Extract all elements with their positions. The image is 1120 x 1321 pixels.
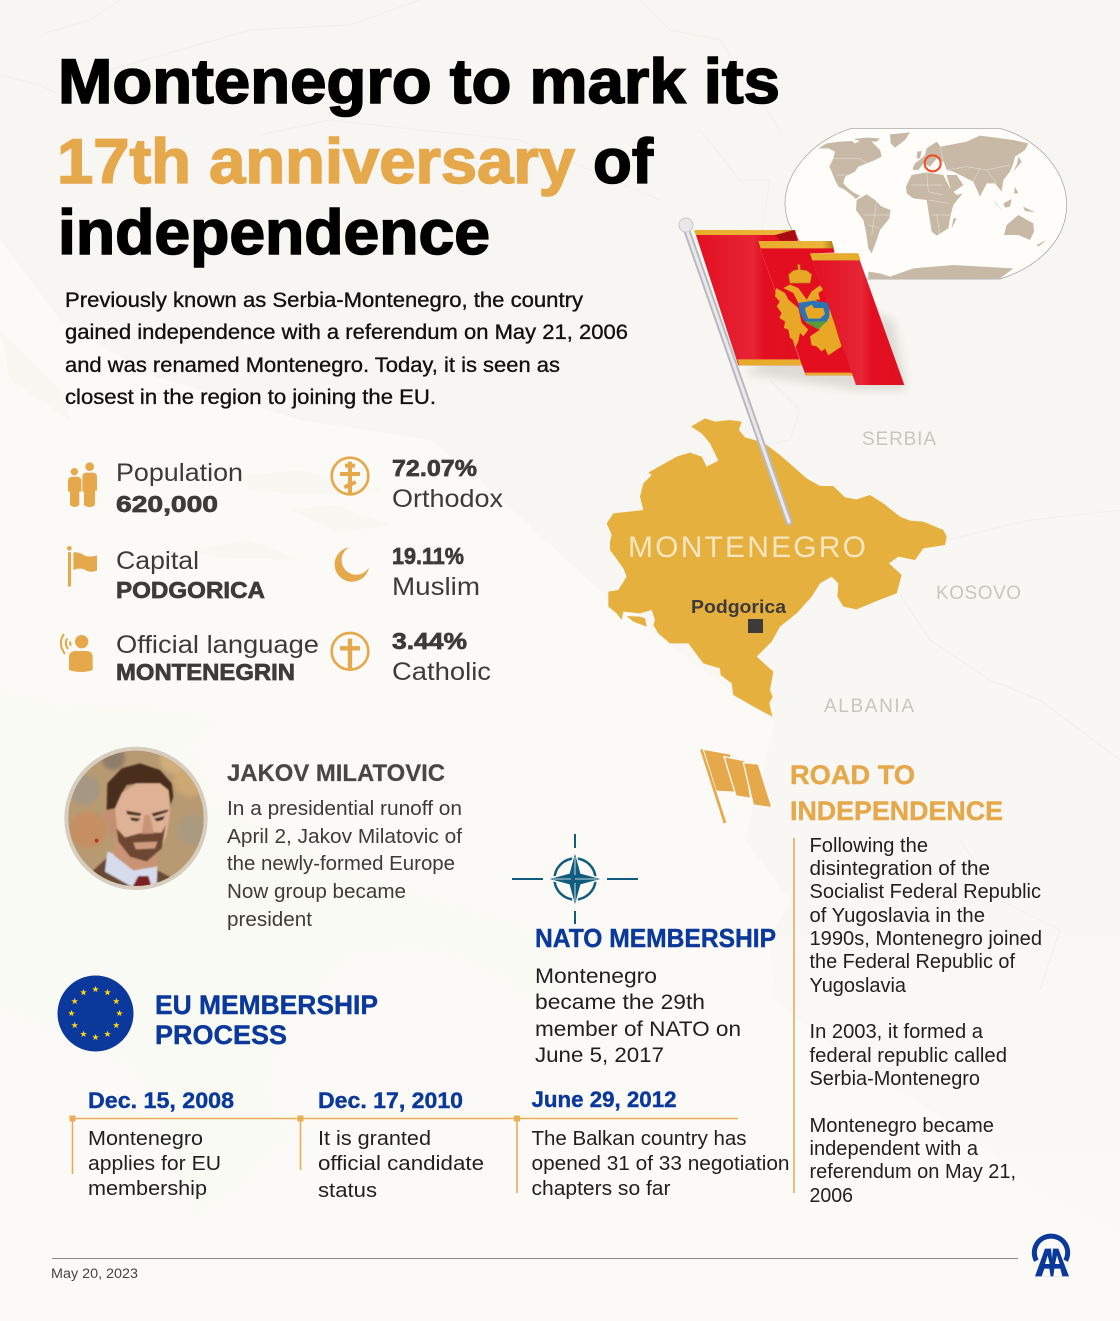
title: 17th anniversary <box>57 127 575 197</box>
stat: catholic: Catholic <box>392 658 491 686</box>
stat: muslim <box>335 543 480 601</box>
world locator map <box>785 128 1067 279</box>
EU heading: PROCESS <box>155 1020 287 1050</box>
icon: crescent <box>335 547 369 582</box>
stat: population: 620,000 <box>116 491 218 517</box>
title: of <box>593 127 654 197</box>
stat: language: Official language <box>116 631 319 659</box>
stat: population <box>68 459 243 517</box>
icon: people <box>68 462 97 507</box>
stat: orthodox: 72.07% <box>392 455 477 481</box>
intro text <box>65 289 628 409</box>
step 3: opened 31 of 33 negotiation <box>532 1153 790 1175</box>
stat: capital <box>67 546 265 603</box>
stat: population: Population <box>116 459 243 487</box>
step 3: The Balkan country has <box>532 1128 746 1150</box>
icon: EU flag <box>58 976 134 1052</box>
flag pole <box>679 218 789 522</box>
president text: the newly-formed Europe <box>227 852 455 875</box>
step 2: official candidate <box>318 1153 484 1175</box>
step 2: status <box>318 1180 377 1202</box>
stat: language <box>61 631 319 685</box>
country label: MONTENEGRO <box>628 531 866 564</box>
icon: NATO compass <box>512 834 638 924</box>
president text: In a presidential runoff on <box>227 797 462 820</box>
road to independence text: the Federal Republic of <box>810 951 1015 973</box>
road to independence text: disintegration of the <box>810 858 990 880</box>
president text: Now group became <box>227 880 406 903</box>
step 3 <box>532 1087 790 1200</box>
NATO section: Montenegro <box>535 965 657 988</box>
step 2 <box>318 1088 484 1202</box>
neighbour labels <box>824 429 1021 717</box>
step 1: Montenegro <box>88 1128 203 1150</box>
road to independence text: referendum on May 21, <box>810 1161 1016 1183</box>
NATO section: NATO MEMBERSHIP <box>535 923 776 953</box>
montenegro map <box>607 218 1021 717</box>
stat: orthodox: Orthodox <box>392 485 504 513</box>
capital marker <box>748 619 763 633</box>
capital label: Podgorica <box>691 597 787 617</box>
stat: muslim: Muslim <box>392 573 480 601</box>
NATO section: became the 29th <box>535 991 705 1014</box>
road to independence heading: ROAD TO <box>790 760 915 790</box>
step 2: It is granted <box>318 1128 431 1150</box>
intro text: gained independence with a referendum on May 21, 2006 <box>65 321 628 344</box>
road to independence text: In 2003, it formed a <box>810 1021 984 1043</box>
road to independence text: Socialist Federal Republic <box>810 881 1041 903</box>
icon: orthodox cross <box>332 458 368 494</box>
stat: orthodox <box>332 455 504 513</box>
title: independence <box>58 198 490 268</box>
icon: speaker <box>61 634 93 672</box>
road to independence text: Serbia-Montenegro <box>810 1068 980 1090</box>
road to independence heading <box>790 760 1003 826</box>
step 3: June 29, 2012 <box>532 1087 676 1112</box>
EU heading: EU MEMBERSHIP <box>155 990 378 1020</box>
footer date: May 20, 2023 <box>51 1266 138 1281</box>
coat of arms <box>775 265 842 355</box>
EU timeline <box>70 1087 790 1202</box>
road to independence text: 2006 <box>810 1185 853 1207</box>
road to independence text: Following the <box>810 835 928 857</box>
stat: muslim: 19.11% <box>392 543 464 569</box>
intro text: closest in the region to joining the EU. <box>65 386 436 409</box>
icon: latin cross <box>332 633 368 670</box>
EU heading <box>155 990 378 1050</box>
intro text: and was renamed Montenegro. Today, it is seen as <box>65 354 560 377</box>
step 3: chapters so far <box>532 1178 671 1200</box>
stat: language: MONTENEGRIN <box>116 659 295 685</box>
neighbour labels: KOSOVO <box>936 583 1021 604</box>
NATO section <box>535 923 776 1067</box>
road to independence text <box>794 835 1042 1207</box>
intro text: Previously known as Serbia-Montenegro, the country <box>65 289 584 312</box>
portrait <box>63 747 210 893</box>
NATO section: June 5, 2017 <box>535 1044 664 1067</box>
road to independence text: federal republic called <box>810 1045 1007 1067</box>
icon: flag <box>67 546 97 587</box>
step 1: applies for EU <box>88 1153 221 1175</box>
road to independence text: 1990s, Montenegro joined <box>810 928 1042 950</box>
NATO section: member of NATO on <box>535 1018 741 1041</box>
president text: JAKOV MILATOVIC <box>227 760 445 787</box>
icon: waving flag <box>700 749 772 823</box>
step 1 <box>88 1088 234 1200</box>
stat: capital: PODGORICA <box>116 577 265 603</box>
neighbour labels: ALBANIA <box>824 696 914 717</box>
stat: capital: Capital <box>116 547 199 575</box>
title <box>57 47 780 268</box>
road to independence text: of Yugoslavia in the <box>810 905 985 927</box>
step 1: membership <box>88 1178 207 1200</box>
president text: April 2, Jakov Milatovic of <box>227 825 462 848</box>
road to independence text: Yugoslavia <box>810 975 907 997</box>
president text: president <box>227 908 312 931</box>
title: Montenegro to mark its <box>58 47 780 117</box>
road to independence text: independent with a <box>810 1138 979 1160</box>
stat: catholic <box>332 628 491 686</box>
road to independence text: Montenegro became <box>810 1115 994 1137</box>
road to independence heading: INDEPENDENCE <box>790 796 1003 826</box>
president text <box>227 760 462 931</box>
step 2: Dec. 17, 2010 <box>318 1088 463 1113</box>
neighbour labels: SERBIA <box>862 429 936 450</box>
step 1: Dec. 15, 2008 <box>88 1088 234 1113</box>
montenegro flag <box>694 230 907 390</box>
stat: catholic: 3.44% <box>392 628 467 654</box>
icon: AA logo <box>1034 1236 1069 1276</box>
